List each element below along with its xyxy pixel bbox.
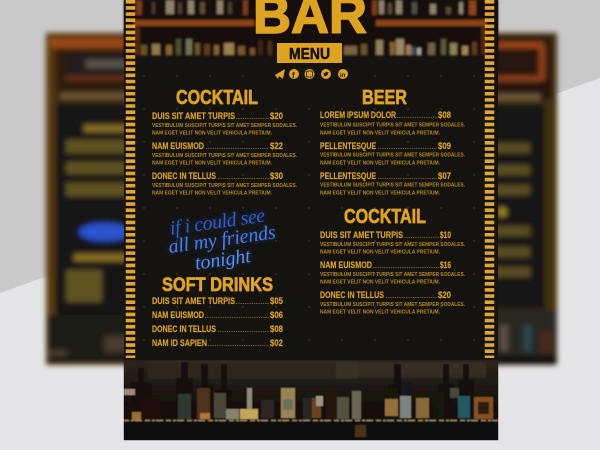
item: VESTIBULUM SUSCIPIT TURPIS SIT AMET SEMPER SODALES. <box>320 122 466 128</box>
heading: BEER: BEER <box>362 87 407 109</box>
neon sign: if i could see <box>168 205 267 240</box>
icon: twitter <box>321 69 331 79</box>
item <box>320 230 466 256</box>
item: $22 <box>270 141 283 151</box>
item: VESTIBULUM SUSCIPIT TURPIS SIT AMET SEMPER SODALES. <box>320 272 466 278</box>
item <box>320 260 466 286</box>
item: VESTIBULUM SUSCIPIT TURPIS SIT AMET SEMPER SODALES. <box>152 183 298 189</box>
menu list: soft drinks <box>152 296 283 348</box>
item: NAM EGET VELIT NON VELIT VEHICULA PRETIUM. <box>320 160 441 166</box>
item: VESTIBULUM SUSCIPIT TURPIS SIT AMET SEMPER SODALES. <box>152 123 298 129</box>
item: NAM EUISMOD <box>152 310 204 320</box>
item: DUIS SIT AMET TURPIS <box>320 230 403 240</box>
item <box>152 338 283 348</box>
item: NAM EGET VELIT NON VELIT VEHICULA PRETIUM. <box>320 190 441 196</box>
item: VESTIBULUM SUSCIPIT TURPIS SIT AMET SEMPER SODALES. <box>320 182 466 188</box>
item <box>152 111 298 136</box>
item: VESTIBULUM SUSCIPIT TURPIS SIT AMET SEMPER SODALES. <box>152 153 298 159</box>
item: NAM EGET VELIT NON VELIT VEHICULA PRETIUM. <box>320 130 441 136</box>
top shelf photo <box>124 0 498 56</box>
neon sign: tonight <box>194 245 252 275</box>
item <box>152 324 283 334</box>
side dash strip right <box>485 0 494 358</box>
heading: SOFT DRINKS: SOFT DRINKS <box>162 275 273 296</box>
icon: telegram <box>275 69 285 79</box>
item: NAM EGET VELIT NON VELIT VEHICULA PRETIUM. <box>320 250 441 256</box>
item: $08 <box>270 324 283 334</box>
item: $10 <box>440 230 451 240</box>
menu list: left cocktails <box>152 111 298 196</box>
neon sign: all my friends <box>167 221 277 258</box>
item: $20 <box>270 111 283 121</box>
item: PELLENTESQUE <box>320 171 376 181</box>
item <box>152 171 298 196</box>
social icons <box>275 69 348 80</box>
item: $09 <box>438 141 451 151</box>
upper shelf bottles <box>152 0 463 14</box>
item <box>152 310 283 320</box>
badge: MENU <box>277 43 342 63</box>
item: $06 <box>270 310 283 320</box>
bottom bottles photo <box>124 360 498 440</box>
neon sign: if i could see <box>168 205 267 240</box>
item: NAM ID SAPIEN <box>152 338 207 348</box>
item: $20 <box>438 290 451 300</box>
item <box>152 141 298 166</box>
item: LOREM IPSUM DOLOR <box>320 110 396 120</box>
item: DUIS SIT AMET TURPIS <box>152 296 235 306</box>
item: PELLENTESQUE <box>320 141 376 151</box>
back poster left (blurred) <box>46 33 136 365</box>
neon sign <box>164 203 280 278</box>
item: NAM EGET VELIT NON VELIT VEHICULA PRETIUM. <box>152 190 273 196</box>
item <box>320 171 466 196</box>
lower shelf bottles <box>141 39 477 55</box>
item: $08 <box>438 110 451 120</box>
item: DONEC IN TELLUS <box>320 290 384 300</box>
item: DONEC IN TELLUS <box>152 324 216 334</box>
icon: facebook: f <box>292 71 295 80</box>
item: $05 <box>270 296 283 306</box>
badge: MENU: MENU <box>289 46 330 63</box>
side dash strip left <box>126 0 135 358</box>
item: DONEC IN TELLUS <box>152 171 216 181</box>
icon: linkedin: in <box>340 73 346 79</box>
item: $07 <box>438 171 451 181</box>
item: NAM EGET VELIT NON VELIT VEHICULA PRETIUM. <box>320 280 441 286</box>
item: NAM EUISMOD <box>152 141 204 151</box>
item <box>320 110 466 136</box>
item: DUIS SIT AMET TURPIS <box>152 111 235 121</box>
item: NAM EGET VELIT NON VELIT VEHICULA PRETIUM. <box>152 160 273 166</box>
item <box>320 141 466 166</box>
item: NAM EGET VELIT NON VELIT VEHICULA PRETIUM. <box>152 130 273 136</box>
item: VESTIBULUM SUSCIPIT TURPIS SIT AMET SEMPER SODALES. <box>320 302 466 308</box>
menu list: right cocktails <box>320 230 466 316</box>
icon: instagram <box>304 69 314 79</box>
item: NAM EUISMOD <box>320 260 372 270</box>
heading: COCKTAIL (right): COCKTAIL <box>344 206 426 228</box>
item: $30 <box>270 171 283 181</box>
item: $16 <box>440 260 451 270</box>
neon sign: tonight <box>194 245 252 275</box>
item: VESTIBULUM SUSCIPIT TURPIS SIT AMET SEMPER SODALES. <box>320 152 466 158</box>
poster base <box>124 0 498 440</box>
item: NAM EGET VELIT NON VELIT VEHICULA PRETIUM. <box>320 310 441 316</box>
heading: COCKTAIL (left): COCKTAIL <box>176 87 258 109</box>
main poster <box>124 0 498 440</box>
back poster right (blurred) <box>490 33 557 365</box>
neon sign: all my friends <box>167 221 277 258</box>
item: VESTIBULUM SUSCIPIT TURPIS SIT AMET SEMPER SODALES. <box>320 242 466 248</box>
menu list: beer <box>320 110 466 196</box>
item <box>320 290 466 316</box>
item: $02 <box>270 338 283 348</box>
